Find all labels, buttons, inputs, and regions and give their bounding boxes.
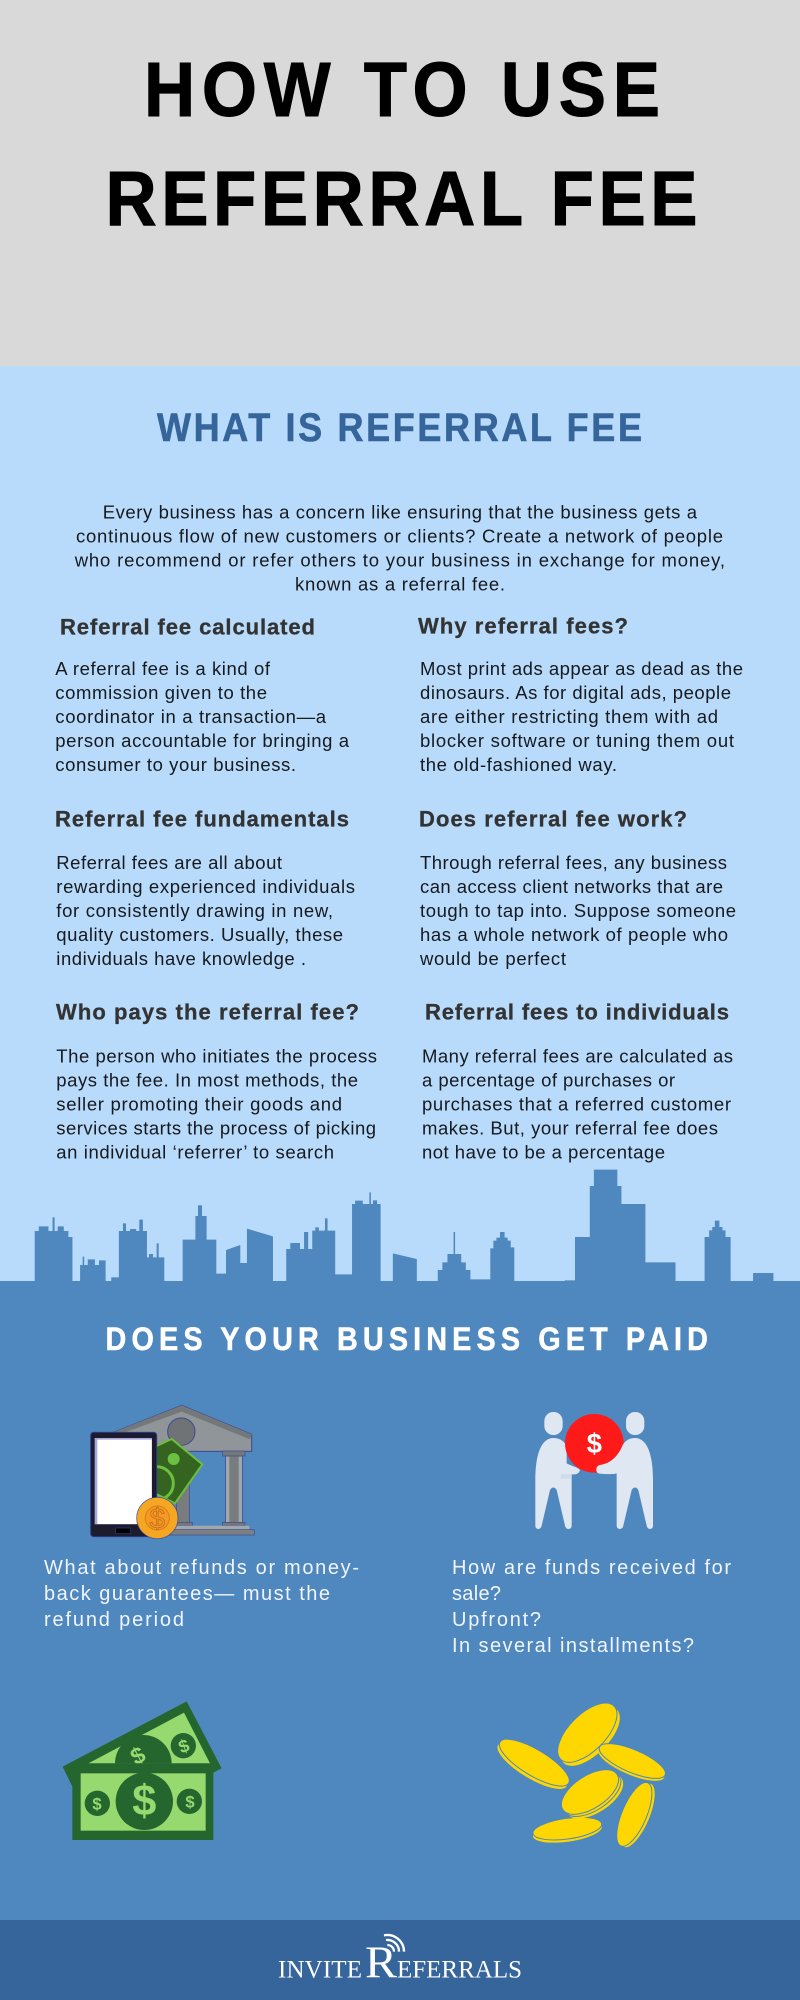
text block: refunds question: refund period <box>44 1609 184 1631</box>
text block: referral fees to individuals: Many referral fees are calculated as <box>422 1045 733 1066</box>
panel: what is referral fee <box>0 366 800 1282</box>
icon: scattered gold coins <box>492 1693 670 1852</box>
text block: referral fees to individuals: not have to be a percentage <box>422 1141 665 1162</box>
icon: green banknotes: $ <box>185 1793 195 1812</box>
text block: who pays the referral fee: services starts the process of picking <box>56 1117 376 1138</box>
text block: referral fee fundamentals: rewarding experienced individuals <box>56 876 355 897</box>
panel: footer <box>0 1920 800 2000</box>
title: HOW TO USE <box>144 46 660 133</box>
heading: referral fees to individuals: Referral fees to individuals <box>425 1000 729 1025</box>
icon: green banknotes <box>63 1701 222 1840</box>
text block: refunds question <box>44 1557 359 1631</box>
text block: referral fee fundamentals: Referral fees are all about <box>56 852 282 873</box>
logo: invite referrals: R <box>365 1938 397 1988</box>
text block: who pays the referral fee: The person who initiates the process <box>56 1045 377 1066</box>
text block: why referral fees: blocker software or tuning them out <box>420 730 734 751</box>
icon: green banknotes: $ <box>126 1741 150 1770</box>
text block: why referral fees: Most print ads appear as dead as the <box>420 658 743 679</box>
text block: referral fees to individuals <box>422 1045 733 1162</box>
text block: does referral fee work: can access client networks that are <box>420 876 723 897</box>
text block: why referral fees: dinosaurs. As for digital ads, people <box>420 682 731 703</box>
text block: who pays the referral fee: pays the fee. In most methods, the <box>56 1069 358 1090</box>
heading: referral fee fundamentals: Referral fee fundamentals <box>55 807 349 832</box>
text block: introduction: continuous flow of new customers or clients? Create a network of people <box>76 525 723 546</box>
heading: who pays the referral fee: Who pays the referral fee? <box>56 1000 359 1025</box>
text block: introduction: known as a referral fee. <box>295 573 505 594</box>
panel: title header <box>0 0 800 366</box>
text block: why referral fees: are either restricting them with ad <box>420 706 718 727</box>
icon: green banknotes: $ <box>132 1778 156 1826</box>
text block: refunds question: back guarantees— must the <box>44 1583 330 1605</box>
text block: referral fee calculated: consumer to your business. <box>55 754 296 775</box>
icon: two people holding a dollar coin <box>535 1412 653 1529</box>
text block: who pays the referral fee <box>56 1045 377 1162</box>
title: REFERRAL FEE <box>106 155 698 242</box>
text block: referral fee fundamentals: for consistently drawing in new, <box>56 900 333 921</box>
icon: two people holding a dollar coin: $ <box>587 1428 602 1459</box>
icon: bank with tablet, banknote and coin: $ <box>150 1503 166 1534</box>
heading: referral fee calculated: Referral fee calculated <box>60 614 315 639</box>
text block: does referral fee work: would be perfect <box>419 948 566 969</box>
panel: does your business get paid <box>0 1170 800 1920</box>
text block: referral fee calculated: coordinator in a transaction—a <box>55 706 327 727</box>
heading: what is referral fee: WHAT IS REFERRAL FEE <box>157 406 642 450</box>
text block: how funds are received: In several installments? <box>452 1635 694 1657</box>
text block: referral fee fundamentals: individuals have knowledge . <box>56 948 306 969</box>
text block: who pays the referral fee: seller promoting their goods and <box>56 1093 342 1114</box>
icon: signal arcs <box>384 1935 404 1952</box>
text block: how funds are received <box>452 1557 731 1657</box>
text block: referral fee fundamentals <box>56 852 355 969</box>
heading: does your business get paid: DOES YOUR BUSINESS GET PAID <box>106 1322 708 1357</box>
text block: referral fee fundamentals: quality customers. Usually, these <box>56 924 343 945</box>
logo: invite referrals: EFERRALS <box>397 1957 522 1984</box>
icon: green banknotes: $ <box>176 1735 192 1757</box>
text block: why referral fees <box>420 658 743 775</box>
text block: does referral fee work: Through referral fees, any business <box>420 852 727 873</box>
heading: does referral fee work: Does referral fee work? <box>419 807 687 832</box>
text block: introduction: who recommend or refer others to your business in exchange for money, <box>74 549 725 570</box>
text block: introduction <box>74 501 725 594</box>
text block: referral fees to individuals: a percentage of purchases or <box>422 1069 675 1090</box>
title <box>106 46 698 242</box>
text block: why referral fees: the old-fashioned way. <box>420 754 617 775</box>
text block: referral fee calculated: commission given to the <box>55 682 267 703</box>
text block: how funds are received: sale? <box>452 1583 501 1605</box>
text block: referral fees to individuals: makes. But, your referral fee does <box>422 1117 718 1138</box>
text block: referral fees to individuals: purchases that a referred customer <box>422 1093 731 1114</box>
text block: does referral fee work <box>419 852 736 969</box>
text block: who pays the referral fee: an individual ‘referrer’ to search <box>56 1141 334 1162</box>
text block: how funds are received: Upfront? <box>452 1609 541 1631</box>
icon: bank with tablet, banknote and coin <box>91 1405 254 1539</box>
text block: does referral fee work: tough to tap into. Suppose someone <box>420 900 736 921</box>
text block: referral fee calculated: person accountable for bringing a <box>55 730 350 751</box>
text block: how funds are received: How are funds received for <box>452 1557 731 1579</box>
city skyline silhouette <box>35 1170 773 1281</box>
heading: why referral fees: Why referral fees? <box>418 614 628 639</box>
icon: green banknotes: $ <box>92 1795 102 1814</box>
text block: introduction: Every business has a concern like ensuring that the business gets a <box>103 501 698 522</box>
text block: referral fee calculated: A referral fee is a kind of <box>55 658 271 679</box>
logo: invite referrals <box>278 1935 522 1988</box>
text block: refunds question: What about refunds or money- <box>44 1557 359 1579</box>
text block: referral fee calculated <box>55 658 350 775</box>
text block: does referral fee work: has a whole network of people who <box>420 924 728 945</box>
logo: invite referrals: INVITE <box>278 1957 362 1984</box>
